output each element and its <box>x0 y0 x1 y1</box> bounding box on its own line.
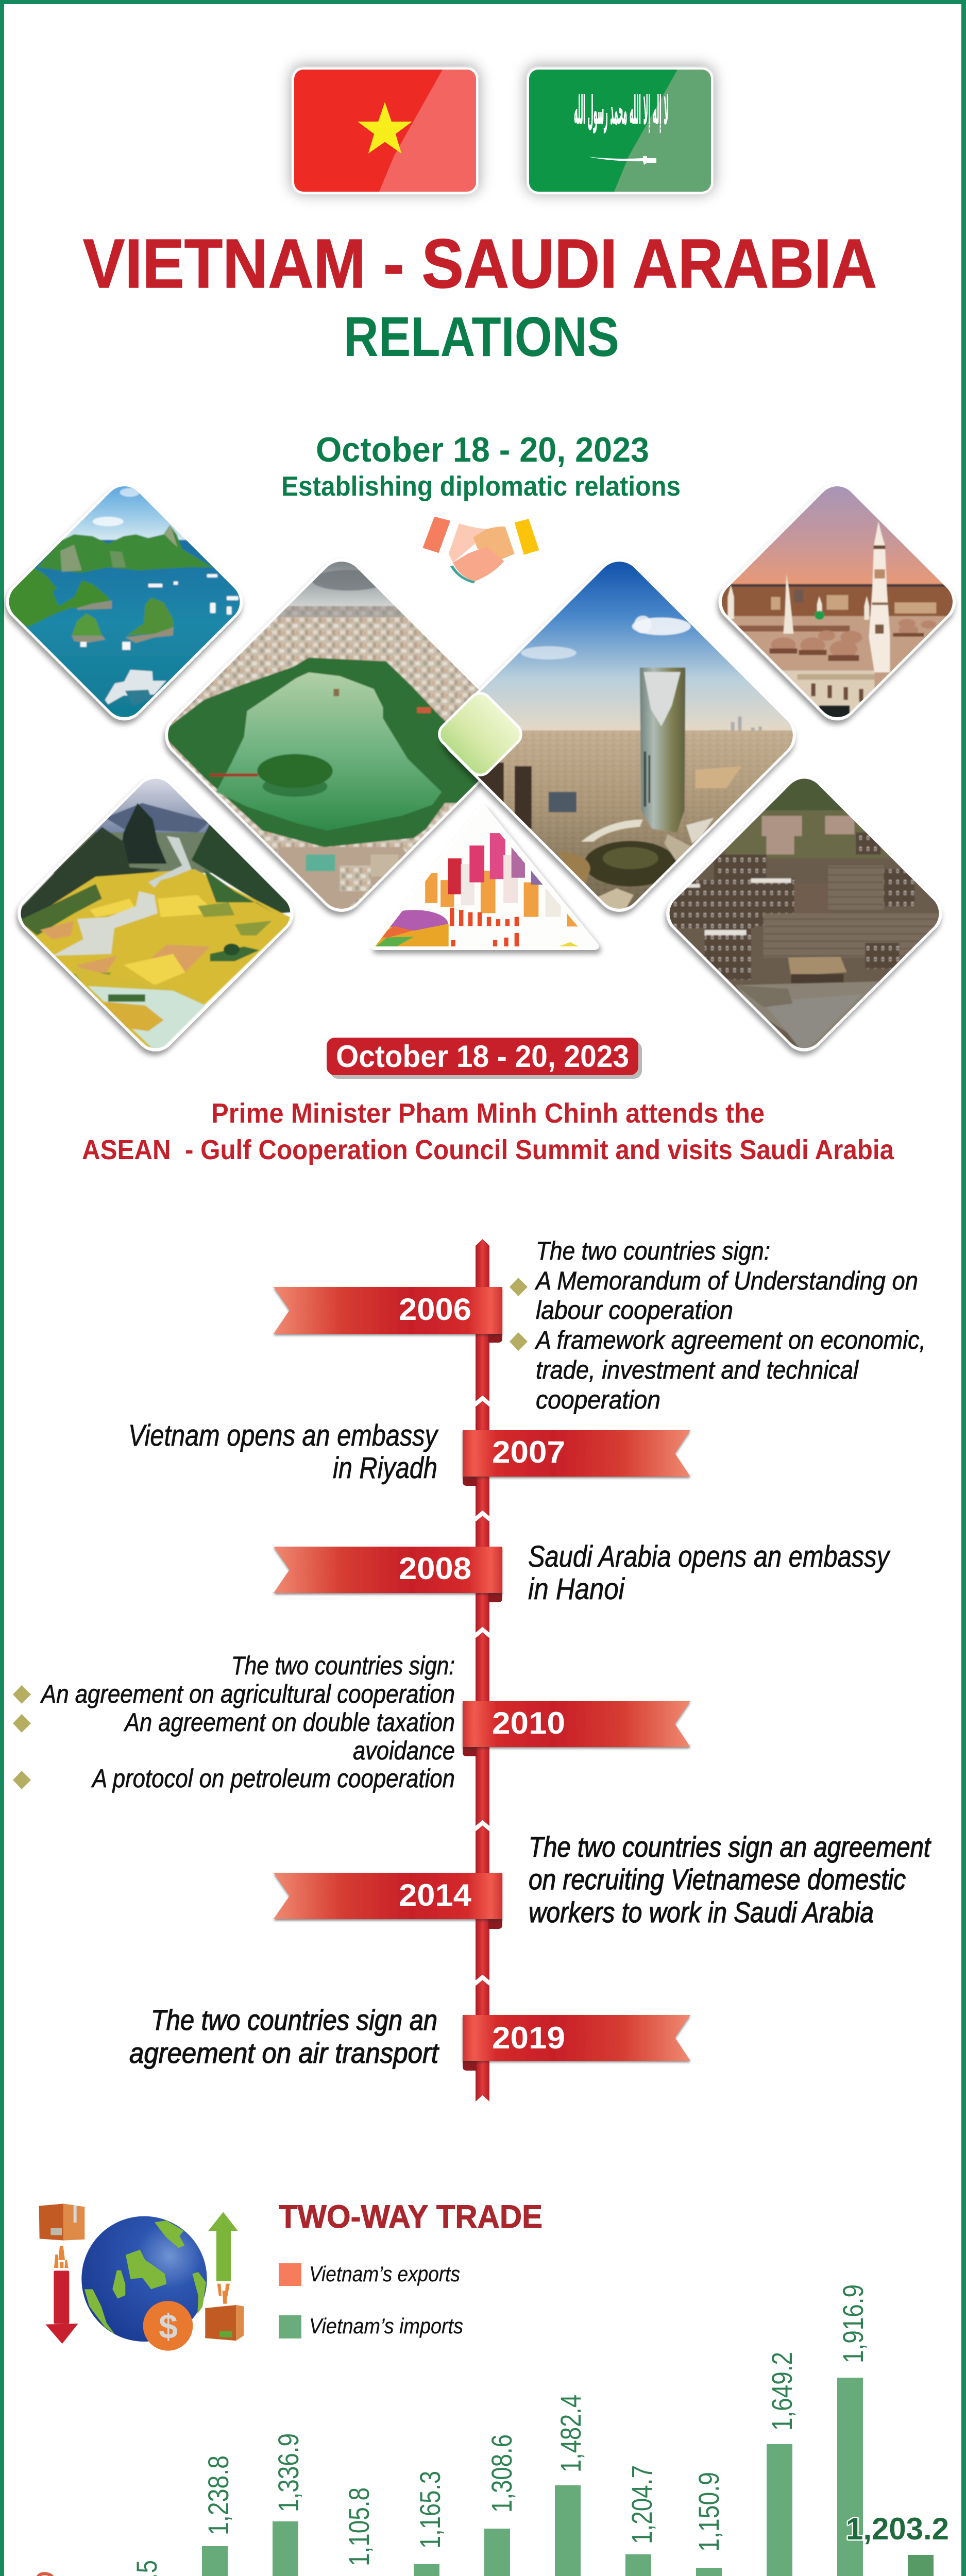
event text: 2006: cooperation <box>536 1385 660 1414</box>
event text: 2014: workers to work in Saudi Arabia <box>529 1896 874 1928</box>
event text: 2010: An agreement on double taxation <box>123 1708 455 1737</box>
import bars <box>61 2378 934 2576</box>
event text: 2010 <box>13 1651 455 1793</box>
icon: handshake <box>422 517 539 582</box>
title <box>83 225 877 368</box>
central light-green diamond <box>435 689 526 779</box>
title: VIETNAM - SAUDI ARABIA <box>83 225 877 302</box>
photo: Medina mosque <box>710 474 964 729</box>
ribbon: 2007: 2007 <box>492 1435 565 1469</box>
date heading: October 18 - 20, 2023 <box>316 430 649 469</box>
title: RELATIONS <box>344 306 619 368</box>
event text: 2006: labour cooperation <box>536 1296 733 1325</box>
ribbon: 2010 <box>463 1701 690 1756</box>
event text: 2007: Vietnam opens an embassy <box>128 1419 439 1452</box>
event text: 2019: agreement on air transport <box>129 2037 439 2069</box>
timeline pole <box>474 1239 490 2102</box>
photo: Ha Long Bay <box>0 474 251 729</box>
event text: 2010: The two countries sign: <box>231 1651 455 1680</box>
ribbon: 2019 <box>463 2015 690 2071</box>
event text: 2008: in Hanoi <box>528 1572 625 1606</box>
ribbon: 2007 <box>463 1430 690 1486</box>
ribbon: 2006: 2006 <box>399 1292 471 1327</box>
import value labels: 1,649.2 <box>766 2352 798 2431</box>
event text: 2007 <box>128 1419 439 1485</box>
date badge: October 18 - 20, 2023 <box>336 1039 629 1074</box>
import value labels: 1,150.9 <box>692 2472 725 2552</box>
legend: Vietnam’s exports <box>309 2262 460 2286</box>
highlighted 2023 values: 1,203.2 <box>846 2512 949 2546</box>
import value labels: 1,105.8 <box>343 2487 375 2566</box>
icon: globe trade: $ <box>159 2308 178 2346</box>
event text: 2010: An agreement on agricultural cooperation <box>40 1680 455 1708</box>
photo: Hanoi lake <box>161 562 484 919</box>
import value labels: 1,308.6 <box>485 2434 518 2513</box>
event text: 2006 <box>510 1236 926 1414</box>
import value labels <box>61 2284 869 2576</box>
bar chart: two-way trade <box>21 2284 949 2576</box>
ribbon: 2008: 2008 <box>399 1551 471 1586</box>
import value labels: 1,204.7 <box>625 2465 658 2544</box>
ribbon: 2019: 2019 <box>492 2021 565 2055</box>
ribbon: 2006 <box>274 1287 502 1343</box>
summit description <box>82 1098 894 1165</box>
event text: 2006: A Memorandum of Understanding on <box>534 1266 918 1295</box>
event text: 2019: The two countries sign an <box>151 2004 437 2036</box>
event text: 2014 <box>529 1831 931 1928</box>
photo: rice fields <box>9 767 302 1060</box>
flag: Vietnam <box>292 67 479 194</box>
heading: two-way trade: TWO-WAY TRADE <box>279 2199 543 2235</box>
event text: 2010: avoidance <box>353 1736 455 1765</box>
ribbon: 2010: 2010 <box>492 1706 565 1740</box>
event text: 2014: on recruiting Vietnamese domestic <box>529 1863 906 1895</box>
import value labels: 1,238.8 <box>202 2455 234 2535</box>
event text: 2006: A framework agreement on economic, <box>534 1326 926 1354</box>
import value labels: 1,336.9 <box>272 2433 304 2512</box>
event text: 2007: in Riyadh <box>333 1451 437 1485</box>
flag: Saudi Arabia <box>527 67 714 194</box>
event text: 2006: The two countries sign: <box>536 1236 770 1265</box>
summit description: ASEAN - Gulf Cooperation Council Summit and visits Saudi Arabia <box>82 1134 894 1165</box>
event text: 2008 <box>528 1540 891 1606</box>
import value labels: 1,482.4 <box>554 2395 587 2472</box>
photo: bar charts triangle <box>371 806 598 949</box>
ribbon: 2008 <box>274 1547 502 1602</box>
event text: 2010: A protocol on petroleum cooperation <box>91 1764 455 1793</box>
summit description: Prime Minister Pham Minh Chinh attends the <box>211 1098 765 1129</box>
icon: globe trade <box>39 2204 244 2351</box>
legend <box>279 2262 463 2338</box>
photo: Rijal Almaa village <box>658 767 951 1060</box>
ribbon: 2014: 2014 <box>399 1878 472 1912</box>
event text: 2019 <box>129 2004 439 2069</box>
import value labels: 1,916.9 <box>837 2284 869 2363</box>
photo: Riyadh skyline <box>440 562 798 919</box>
event text: 2008: Saudi Arabia opens an embassy <box>528 1540 891 1573</box>
event text: 2006: trade, investment and technical <box>536 1355 859 1384</box>
ribbon: 2014 <box>274 1873 502 1929</box>
import value labels: 1,165.3 <box>414 2471 446 2549</box>
subheading: Establishing diplomatic relations <box>281 471 681 502</box>
legend: Vietnam’s imports <box>309 2314 463 2338</box>
